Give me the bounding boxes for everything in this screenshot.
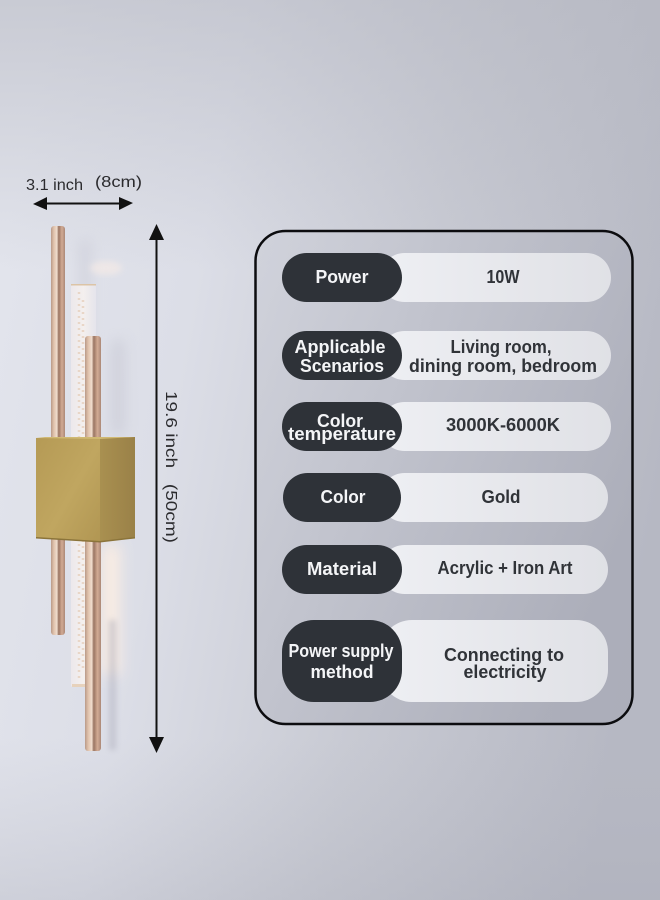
icon: wall lamp [36,226,135,751]
row: power [282,253,611,302]
rear rose-gold rod [51,226,65,635]
row: color temperature: 3000K-6000K [446,415,560,435]
dimension: width [26,174,142,210]
row: material: Material [307,559,377,579]
row: applicable scenarios: Scenarios [300,356,384,376]
row: power: 10W [486,267,520,287]
width label: 3.1 inch [26,177,83,194]
width arrow [33,197,133,210]
row: material: Acrylic + Iron Art [438,558,572,578]
row: color temperature: Color [317,411,363,431]
acrylic bubble rod [71,284,96,687]
dimension: height [149,224,179,753]
row: color temperature [282,402,611,451]
row: material [282,545,608,594]
row: power supply method: electricity [464,662,546,682]
row: power supply method: Power supply [288,641,394,661]
row: applicable scenarios: dining room, bedroom [409,356,597,376]
row: applicable scenarios: Applicable [294,337,386,357]
row: power supply method: Connecting to [444,645,564,665]
front rose-gold rod [85,336,101,751]
row: color [283,473,608,522]
row: applicable scenarios: Living room, [450,337,552,357]
row: color: Gold [482,487,520,507]
row: power: Power [316,267,368,287]
dimension: width: (8cm) [95,174,142,191]
row: power supply method [282,620,608,702]
row: color temperature: temperature [288,424,396,444]
panel: specifications [256,231,632,724]
row: color: Color [320,487,366,507]
row: applicable scenarios [282,331,611,380]
height label: 19.6 inch (50cm) [162,391,179,543]
height arrow [149,224,164,753]
row: power supply method: method [310,662,374,682]
brass block [36,437,135,542]
lamp glow and shadows [80,240,124,750]
